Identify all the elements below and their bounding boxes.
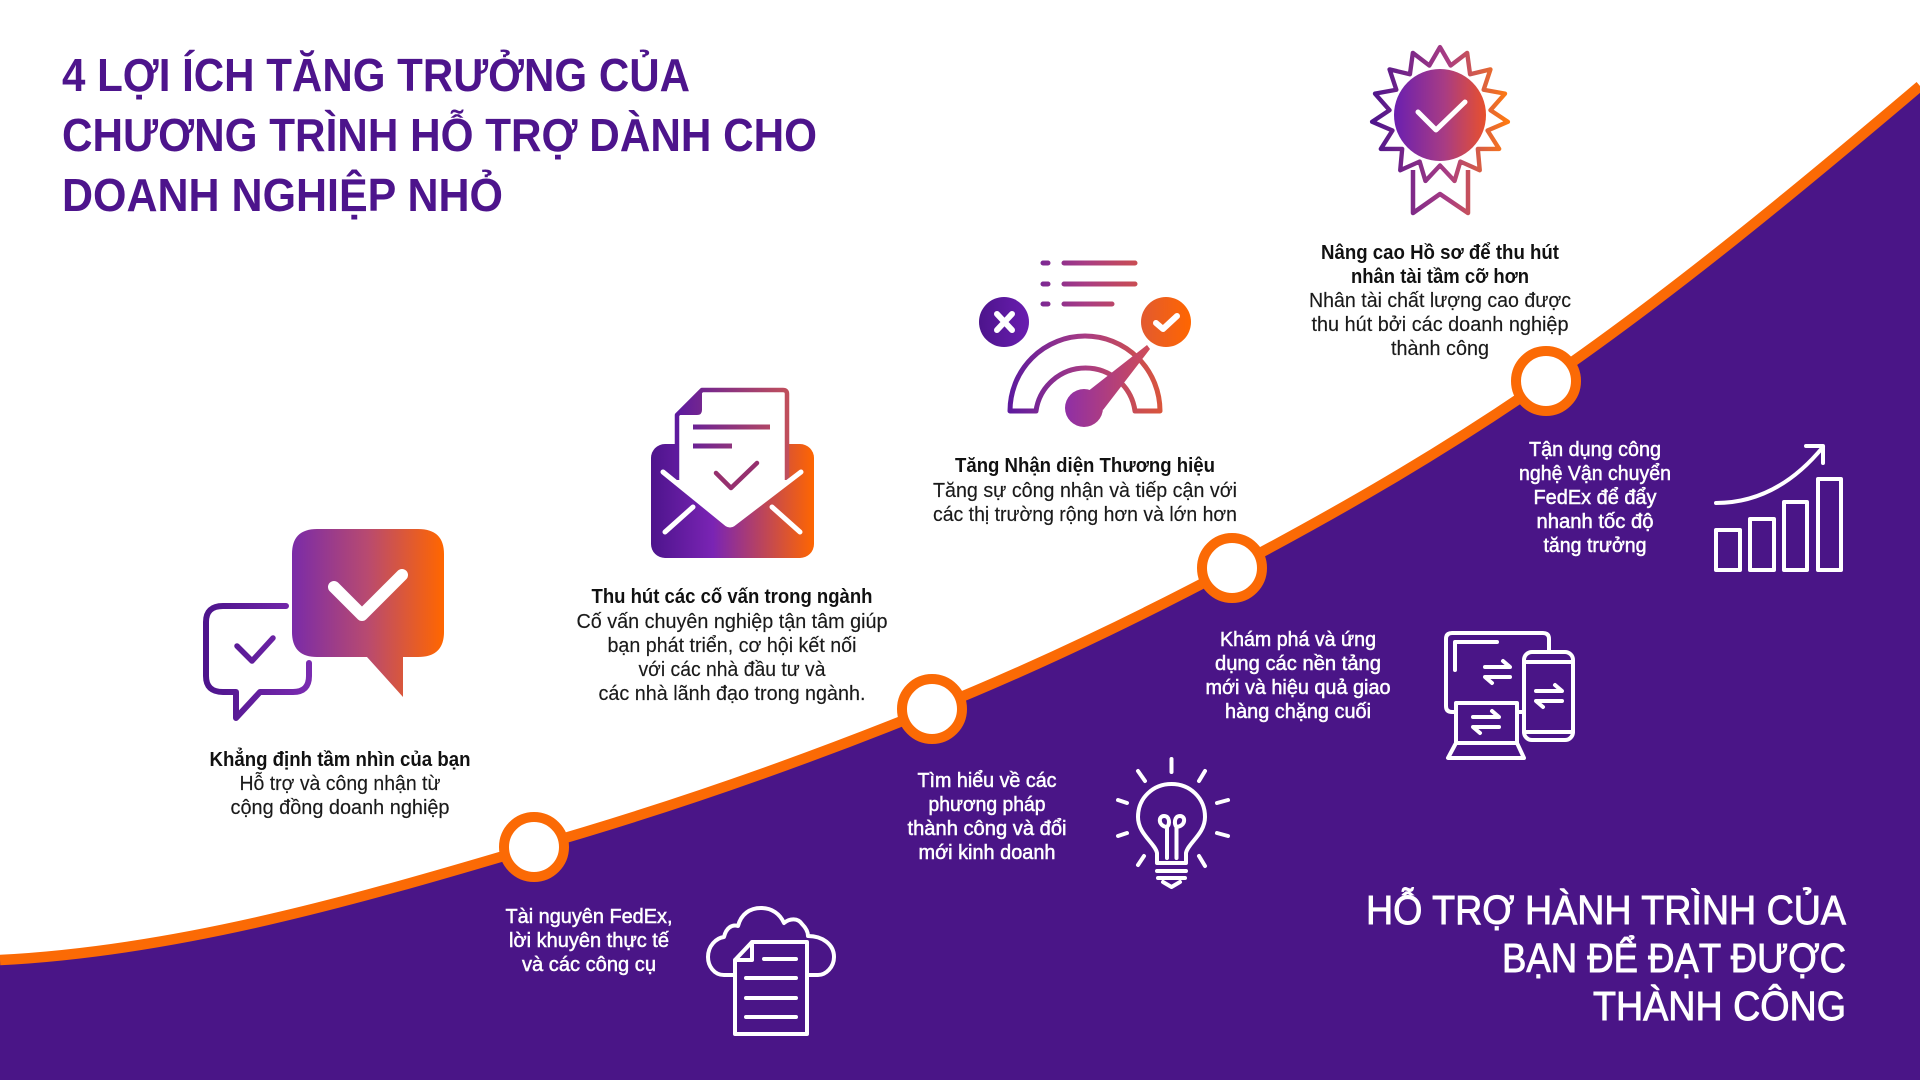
icon: award badge [1372,47,1508,213]
text block: FedEx shipping technology: nhanh tốc độ [1536,511,1654,533]
text block: methods and innovation: mới kinh doanh [918,842,1056,864]
text block: vision: Hỗ trợ và công nhận từ [240,772,440,795]
text block: talent: Nhân tài chất lượng cao được [1309,290,1571,312]
text block: methods and innovation: thành công và đổi [908,818,1066,840]
text block: platforms and last-mile delivery: hàng chặng cuối [1225,701,1371,723]
text block: talent: thu hút bởi các doanh nghiệp [1312,314,1568,336]
text block: advisors: với các nhà đầu tư và [638,659,826,681]
text block: FedEx resources: Tài nguyên FedEx, [506,906,672,928]
closing statement: BẠN ĐỂ ĐẠT ĐƯỢC [1502,934,1846,981]
text block: platforms and last-mile delivery [1206,629,1390,723]
text block: advisors: bạn phát triển, cơ hội kết nối [608,635,856,657]
text block: FedEx shipping technology [1519,439,1671,557]
text block: vision: Khẳng định tầm nhìn của bạn [210,747,470,771]
text block: vision [210,747,470,819]
text block: vision: cộng đồng doanh nghiệp [230,797,450,819]
icon: light bulb [1118,759,1228,887]
text block: advisors: Thu hút các cố vấn trong ngành [592,586,872,608]
text block: platforms and last-mile delivery: dụng các nền tảng [1215,653,1381,675]
text block: talent: thành công [1391,338,1489,360]
text block: advisors: các nhà lãnh đạo trong ngành. [598,683,866,705]
milestone markers on the curve [504,351,1576,877]
icon: envelope with document [651,390,814,558]
icon: cloud document [708,908,834,1034]
icon: brand speedometer [979,263,1191,427]
icon: connected devices [1446,633,1573,758]
text block: FedEx resources: lời khuyên thực tế [509,930,669,952]
text block: FedEx resources: và các công cụ [522,954,656,976]
text block: advisors [576,586,888,705]
text block: methods and innovation: phương pháp [928,794,1046,816]
text block: FedEx shipping technology: nghệ Vận chuyển [1519,463,1671,485]
text block: talent: Nâng cao Hồ sơ để thu hút [1321,242,1559,264]
text block: platforms and last-mile delivery: mới và hiệu quả giao [1206,677,1390,699]
text block: platforms and last-mile delivery: Khám phá và ứng [1220,629,1376,651]
title [62,49,817,221]
text block: brand recognition: Tăng sự công nhận và tiếp cận với [933,480,1237,502]
title: 4 LỢI ÍCH TĂNG TRƯỞNG CỦA [62,49,690,101]
closing statement: HỖ TRỢ HÀNH TRÌNH CỦA [1366,887,1847,933]
text block: advisors: Cố vấn chuyên nghiệp tận tâm giúp [576,611,888,633]
closing statement [1366,887,1847,1029]
icon: growth bar chart with arrow [1716,446,1841,570]
text block: FedEx shipping technology: tăng trưởng [1544,535,1646,557]
text block: talent [1309,242,1571,360]
text block: methods and innovation: Tìm hiểu về các [918,770,1056,792]
text block: brand recognition: Tăng Nhận diện Thương hiệu [955,455,1215,477]
text block: FedEx resources [506,906,672,976]
text block: methods and innovation [908,770,1066,864]
text block: brand recognition [933,455,1237,526]
icon: chat bubbles with check marks [206,529,444,718]
closing statement: THÀNH CÔNG [1593,983,1846,1029]
title: CHƯƠNG TRÌNH HỖ TRỢ DÀNH CHO [62,109,817,161]
text block: talent: nhân tài tầm cỡ hơn [1351,266,1529,288]
text block: FedEx shipping technology: Tận dụng công [1529,439,1661,461]
title: DOANH NGHIỆP NHỎ [62,169,503,221]
text block: FedEx shipping technology: FedEx để đẩy [1534,487,1656,509]
text block: brand recognition: các thị trường rộng hơn và lớn hơn [933,504,1237,526]
